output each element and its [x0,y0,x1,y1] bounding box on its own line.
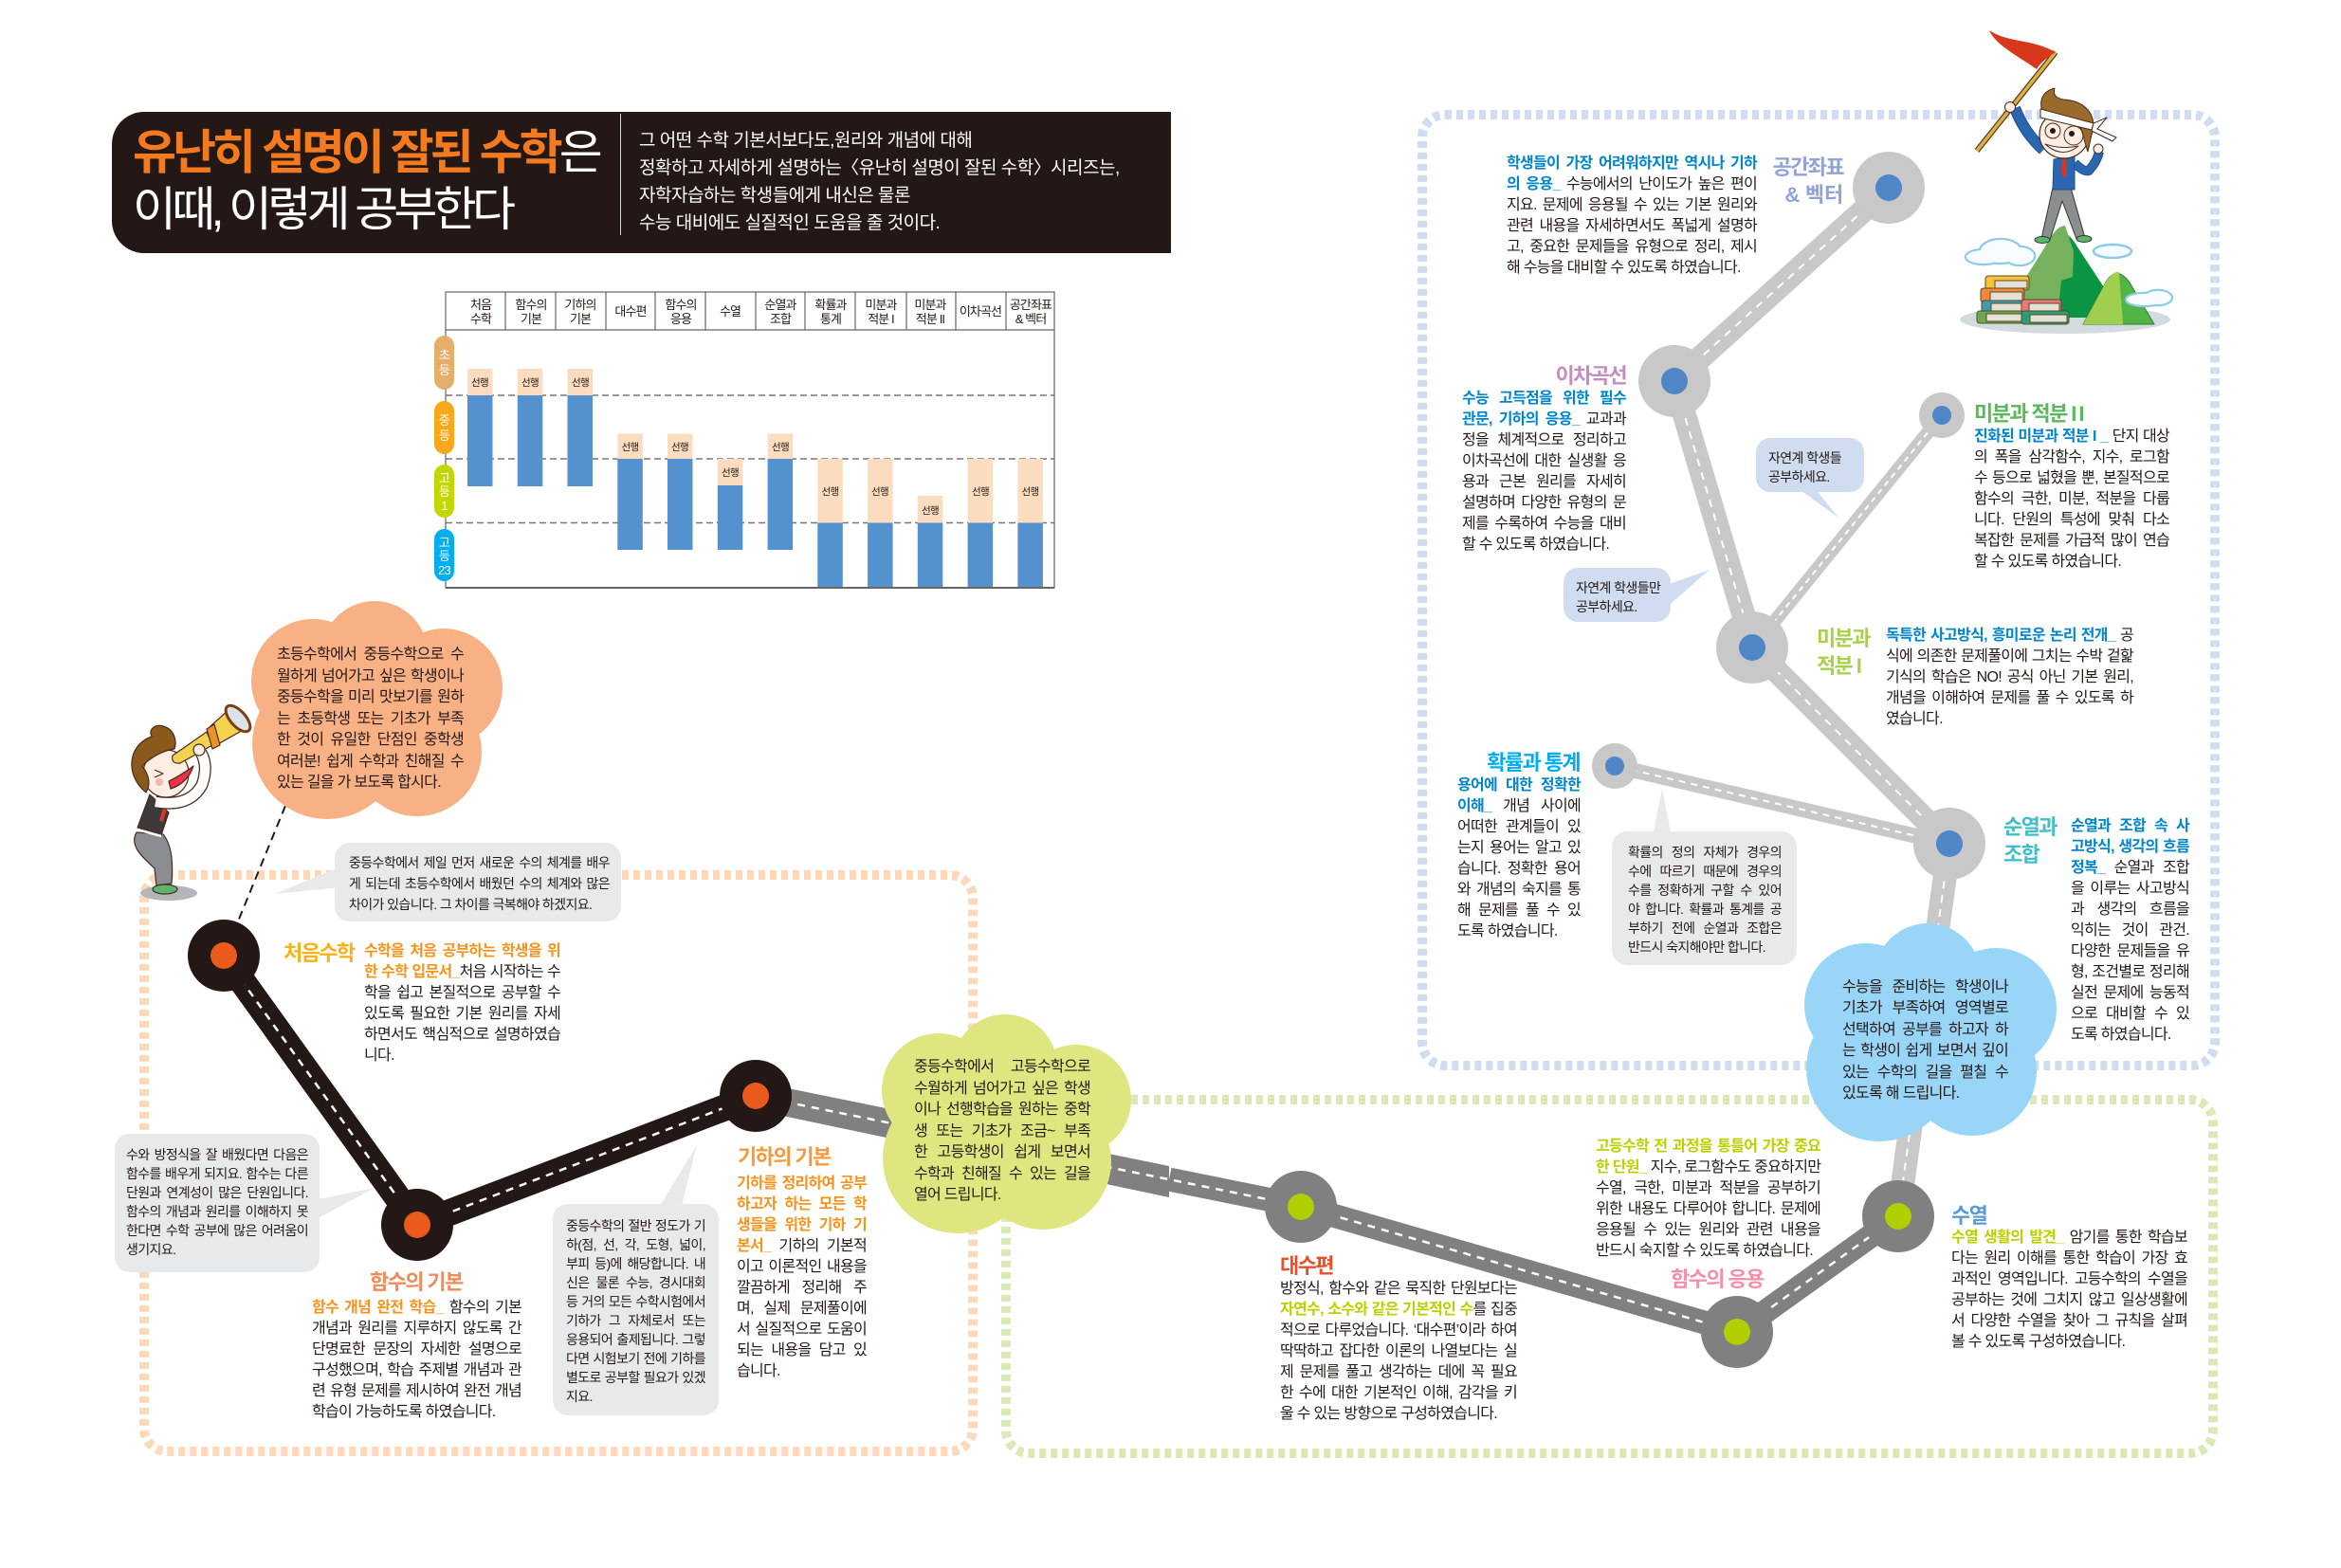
icon: student with telescope [132,702,254,901]
text: probability callout: 수를 정확하게 구할 수 있어 [1628,883,1782,898]
heading: 함수의 응용: 함수의 응용 [1671,1267,1764,1291]
text: top grey callout: 중등수학에서 제일 먼저 새로운 수의 체계를 배우 [349,855,610,870]
chart column headings: 처음 [470,298,492,312]
text: 대수편 [1280,1280,1517,1422]
text: 처음수학: 수학을 처음 공부하는 학생을 위 [364,943,560,959]
frame: green dotted section [1006,1100,2213,1453]
text: 함수의 기본: 구성했으며, 학습 주제별 개념과 관 [312,1362,521,1378]
text: 함수의 응용 [1596,1138,1820,1259]
chart column headings: 통계 [820,312,841,326]
heading: 기하의 기본: 기하의 기본 [738,1145,831,1168]
text: blue cloud [1842,978,2008,1102]
text: top grey callout: 게 되는데 초등수학에서 배웠던 수의 체계와 많은 [349,876,610,891]
text: orange cloud: 월하게 넘어가고 싶은 학생이나 [277,667,464,684]
text: 이차곡선: 이차곡선에 대한 실생활 응 [1462,453,1626,469]
text: 함수의 기본: 단명료한 문장의 자세한 설명으로 [312,1341,521,1358]
chart column headings: 수학 [470,312,492,326]
chart column headings [470,298,1052,326]
text: 순열과 조합: 고방식, 생각의 흐름 [2071,839,2189,855]
text: 공간좌표 & 벡터: 관련 내용을 자세하면서도 폭넓게 설명하 [1507,218,1757,234]
heading: 미분과 적분 I [1817,626,1871,677]
chart column headings: 기본 [570,312,592,326]
text: 미분과 적분 II [1974,428,2169,570]
text: 처음수학: 하면서도 핵심적으로 설명하였습 [364,1027,560,1043]
chart level pills: 23 [438,563,450,577]
text: 함수의 응용: 반드시 숙지할 수 있도록 하였습니다. [1596,1243,1813,1259]
text: 이차곡선: 제를 수록하여 수능을 대비 [1462,516,1626,532]
text: probability callout: 수에 따르기 때문에 경우의 [1628,864,1782,879]
heading: 확률과 통계: 확률과 통계 [1487,751,1580,774]
text: 공간좌표 & 벡터: 고, 중요한 문제들을 유형으로 정리, 제시 [1507,239,1757,255]
text: 수열: 다는 원리 이해를 통한 학습이 가장 효 [1951,1250,2187,1267]
chart column headings: 대수편 [614,304,647,319]
callout bubble: probability grey [1612,789,1797,965]
chart column headings: 기하의 [564,298,596,312]
text: 미분과 적분 I: 식에 의존한 문제풀이에 그치는 수박 겉핥 [1886,648,2133,665]
text: middle grey callout: 부피 등)에 해당합니다. 내 [566,1256,705,1271]
text: 순열과 조합: 형, 조건별로 정리해 [2071,964,2189,980]
chart lead-in labels: 선행 [572,377,589,389]
text: 함수의 기본: 련 유형 문제를 제시하여 완전 개념 [312,1383,521,1399]
text: middle grey callout: 하(점, 선, 각, 도형, 넓이, [566,1237,705,1252]
chart column headings: 수열 [720,304,741,319]
callout bubble: top grey [274,843,621,921]
chart level pills: 등 [439,484,450,499]
text: top grey callout [349,855,610,912]
chart column headings: 확률과 [814,298,848,312]
chart column headings: 함수의 [515,298,547,312]
text: 이차곡선: 설명하며 다양한 유형의 문 [1462,495,1626,511]
text: 수열: 볼 수 있도록 구성하였습니다. [1951,1334,2125,1350]
text: 확률과 통계: 는지 용어는 알고 있 [1457,840,1581,856]
text: 처음수학: 학을 쉽고 본질적으로 공부할 수 [364,985,560,1001]
text: 수열 [1951,1229,2187,1350]
text: probability callout: 확률의 정의 자체가 경우의 [1628,845,1782,860]
text: 함수의 기본 [312,1299,521,1420]
road network: light grey upper routes [1615,188,1949,1216]
text: 미분과 적분 II: 수 등으로 넓혔을 뿐, 본질적으로 [1974,470,2169,486]
text: top grey callout: 차이가 있습니다. 그 차이를 극복해야 하겠지요. [349,897,592,912]
text: green cloud: 생 또는 기초가 조금~ 부족 [914,1122,1090,1140]
chart level pills [434,336,454,581]
text: 순열과 조합: 도록 하였습니다. [2071,1027,2171,1043]
text: 미분과 적분 II: 진화된 미분과 적분 I _ 단지 대상 [1974,428,2169,445]
text: 대수편: 적으로 다루었습니다. ‘대수편’이라 하여 [1280,1322,1517,1339]
heading: 공간좌표 & 벡터: & 벡터 [1784,182,1843,207]
text: 순열과 조합: 으로 대비할 수 있 [2071,1006,2189,1022]
text: middle grey callout: 중등수학의 절반 정도가 기 [566,1218,705,1233]
text: 순열과 조합: 정복_ 순열과 조합 [2071,860,2189,876]
chart lead-in labels: 선행 [471,377,488,389]
chart column headings: 함수의 [665,298,697,312]
text: 기하의 기본: 습니다. [737,1363,780,1379]
text: 함수의 응용: 응용될 수 있는 원리와 관련 내용을 [1596,1222,1820,1238]
text: 미분과 적분 II: 복잡한 문제를 가급적 많이 연습 [1974,533,2169,549]
text: middle grey callout: 지요. [566,1389,593,1404]
text: 함수의 기본: 함수 개념 완전 학습_ 함수의 기본 [312,1300,521,1316]
banner intro text [639,131,1120,233]
heading: 순열과 조합 [2003,815,2058,866]
text: orange cloud: 는 초등학생 또는 기초가 부족 [277,711,464,726]
text: middle grey callout: 기하가 그 자체로서 또는 [566,1313,705,1328]
text: 함수의 응용: 수열, 극한, 미분과 적분을 공부하기 [1596,1180,1820,1196]
text: 기하의 기본: 되는 내용을 담고 있 [737,1342,867,1358]
heading: 순열과 조합: 조합 [2003,842,2039,866]
text: 이차곡선: 용과 근본 원리를 자세히 [1462,474,1626,490]
banner intro text: 정확하고 자세하게 설명하는 〈유난히 설명이 잘된 수학〉 시리즈는, [639,158,1120,178]
text: green cloud: 이나 선행학습을 원하는 중학 [914,1102,1090,1118]
text: blue bubble right: 공부하세요. [1768,469,1830,484]
text: 대수편: 방정식, 함수와 같은 묵직한 단원보다는 [1280,1281,1517,1297]
text: left grey callout: 함수를 배우게 되지요. 함수는 다른 [126,1166,308,1181]
text: 확률과 통계: 해 문제를 풀 수 있 [1457,903,1581,919]
frame: blue dotted section [1422,115,2215,1066]
text: 처음수학: 니다. [364,1048,394,1064]
text: green cloud [914,1058,1090,1203]
text: 대수편: 딱딱하고 잡다한 이론의 나열보다는 실 [1280,1343,1517,1359]
text: 이차곡선: 정을 체계적으로 정리하고 [1462,432,1626,448]
text: 미분과 적분 II: 의 폭을 삼각함수, 지수, 로그함 [1974,449,2169,465]
banner intro text: 그 어떤 수학 기본서보다도,원리와 개념에 대해 [639,131,972,151]
text: 확률과 통계: 도록 하였습니다. [1457,923,1558,939]
road network: dark grey lower routes [756,1082,1898,1332]
text: 이차곡선: 수능 고득점을 위한 필수 [1462,391,1626,407]
text: 대수편: 자연수, 소수와 같은 기본적인 수를 집중 [1280,1302,1517,1318]
text: left grey callout: 생기지요. [126,1242,175,1257]
text: orange cloud [277,647,465,791]
text: blue cloud: 수능을 준비하는 학생이나 [1842,979,2008,995]
callout bubble: left grey [115,1134,375,1272]
text: 미분과 적분 I: 독특한 사고방식, 흥미로운 논리 전개_ 공 [1886,628,2133,644]
cloud: blue [1804,923,2057,1141]
callout bubble: middle grey [553,1145,719,1415]
text: blue cloud: 있는 수학의 길을 펼칠 수 [1842,1065,2008,1081]
text: 확률과 통계: 어떠한 관계들이 있 [1457,819,1581,835]
text: blue cloud: 있도록 해 드립니다. [1842,1085,1959,1102]
text: 순열과 조합: 익히는 것이 관건. [2071,922,2189,939]
text: orange cloud: 여러분! 쉽게 수학과 친해질 수 [277,753,464,770]
chart lead-in labels: 선행 [671,442,688,453]
chart level pills: 1 [441,499,448,513]
text: 순열과 조합 [2071,817,2190,1043]
text: 이차곡선: 할 수 있도록 하였습니다. [1462,537,1609,553]
frame: orange dotted section [144,875,973,1451]
chart lead-in labels: 선행 [772,442,789,453]
heading line two: 이때, 이렇게 공부한다 [133,183,511,236]
text: blue cloud: 기초가 부족하여 영역별로 [1842,1000,2008,1016]
text: middle grey callout: 등 거의 모든 수학시험에서 [566,1294,705,1309]
text: 확률과 통계 [1457,776,1582,939]
chart column headings: 순열과 [764,298,797,312]
text: 순열과 조합: 을 이루는 사고방식 [2071,881,2189,897]
chart column headings: & 벡터 [1015,312,1046,326]
text: 미분과 적분 II: 함수의 극한, 미분, 적분을 다룹 [1974,491,2169,507]
chart column headings: 공간좌표 [1010,298,1052,312]
text: green cloud: 수월하게 넘어가고 싶은 학생 [914,1081,1090,1096]
text: blue cloud: 선택하여 공부를 하고자 하 [1842,1022,2008,1038]
heading: 공간좌표 & 벡터 [1772,155,1844,207]
text: middle grey callout: 응용되어 출제됩니다. 그렇 [566,1332,705,1347]
text: left grey callout: 함수의 개념과 원리를 이해하지 못 [126,1204,308,1219]
banner intro text: 수능 대비에도 실질적인 도움을 줄 것이다. [639,213,940,233]
text: 대수편: 울 수 있는 방향으로 구성하였습니다. [1280,1406,1497,1422]
text: 기하의 기본 [737,1175,867,1379]
text: 기하의 기본: 서 실질적으로 도움이 [737,1322,867,1338]
chart lead-in labels: 선행 [922,505,939,517]
text: blue bubble left: 자연계 학생들만 [1576,580,1660,595]
heading: 대수편: 대수편 [1280,1253,1333,1278]
text: 수열: 과적인 영역입니다. 고등수학의 수열을 [1951,1271,2187,1287]
text: 순열과 조합: 실전 문제에 능동적 [2071,985,2189,1001]
chart peach lead-in bars [467,369,1043,523]
text: left grey callout [126,1147,308,1257]
road network: black beginner route [224,956,756,1225]
cloud: orange [251,601,503,819]
chart level pills: 고 [439,536,450,550]
text: 공간좌표 & 벡터: 해 수능을 대비할 수 있도록 하였습니다. [1507,260,1741,276]
text: probability callout [1628,845,1782,955]
callout bubble: blue right [1756,438,1864,518]
chart column headings: 미분과 [865,298,898,312]
text: 대수편: 한 수에 대한 기본적인 이해, 감각을 키 [1280,1385,1517,1401]
heading: 미분과 적분 I: 미분과 [1817,626,1870,650]
text: 확률과 통계: 용어에 대한 정확한 [1457,777,1581,793]
text: 수열: 서 다양한 수열을 찾아 그 규칙을 살펴 [1951,1313,2187,1329]
text: green cloud: 중등수학에서 고등수학으로 [914,1059,1090,1075]
text: blue cloud: 는 학생이 쉽게 보면서 깊이 [1842,1043,2008,1059]
chart column headings: 응용 [670,312,692,326]
chart level pills: 등 [439,549,450,563]
chart level pills: 고 [439,471,450,485]
text: 공간좌표 & 벡터: 지요. 문제에 응용될 수 있는 기본 원리와 [1507,197,1757,213]
text: 순열과 조합: 다양한 문제들을 유 [2071,943,2189,959]
chart level pills: 중 [439,413,450,428]
text: 미분과 적분 II: 할 수 있도록 하였습니다. [1974,554,2121,570]
icon: student with flag on mountain [1960,30,2172,334]
text: 수열: 공부하는 것에 그치지 않고 일상생활에 [1951,1292,2187,1308]
chart column headings: 미분과 [914,298,947,312]
text: 확률과 통계: 와 개념의 숙지를 통 [1457,882,1581,898]
text: 미분과 적분 I: 였습니다. [1886,711,1943,727]
text: blue bubble left [1576,580,1661,614]
text: blue bubble left: 공부하세요. [1576,599,1637,614]
text: orange cloud: 중등수학을 미리 맛보기를 원하 [277,689,464,705]
text: orange cloud: 초등수학에서 중등수학으로 수 [277,647,464,663]
heading: 공간좌표 & 벡터: 공간좌표 [1772,155,1843,178]
chart lead-in labels: 선행 [521,377,539,389]
text: 함수의 응용: 고등수학 전 과정을 통틀어 가장 중요 [1596,1139,1820,1155]
text: 미분과 적분 II: 니다. 단원의 특성에 맞춰 다소 [1974,512,2169,528]
text: probability callout: 부하기 전에 순열과 조합은 [1628,921,1782,936]
text: 함수의 기본: 학습이 가능하도록 하였습니다. [312,1404,495,1420]
heading line one: 유난히 설명이 잘된 수학은 [133,126,599,179]
text: 처음수학 [364,942,560,1064]
text: probability callout: 반드시 숙지해야만 합니다. [1628,939,1765,955]
text: 처음수학: 있도록 필요한 기본 원리를 자세 [364,1006,560,1022]
text: left grey callout: 한다면 수학 공부에 많은 어려움이 [126,1223,308,1238]
heading: 이차곡선: 이차곡선 [1555,364,1626,387]
text: left grey callout: 단원과 연계성이 많은 단원입니다. [126,1185,308,1200]
chart column headings: 조합 [770,312,792,326]
text: 기하의 기본: 깔끔하게 정리해 주 [737,1280,867,1296]
heading: 미분과 적분 II: 미분과 적분 II [1974,402,2086,425]
text: blue bubble right: 자연계 학생들 [1768,450,1841,465]
road nodes [188,152,1985,1368]
text: 기하의 기본: 며, 실제 문제풀이에 [737,1301,867,1317]
text: 공간좌표 & 벡터: 학생들이 가장 어려워하지만 역시나 기하 [1507,155,1757,172]
chart lead-in labels: 선행 [822,486,838,498]
dashed link from orange cloud to first node [238,806,285,921]
banner divider [620,114,621,235]
text: orange cloud: 있는 길을 가 보도록 합시다. [277,775,441,791]
text: 기하의 기본: 하고자 하는 모든 학 [737,1196,867,1212]
chart column headings: 적분 II [916,312,944,326]
chart column headings: 적분 I [868,312,894,326]
text: 미분과 적분 I: 개념을 이해하여 문제를 풀 수 있도록 하 [1886,690,2133,706]
chart lead-in labels: 선행 [722,467,739,479]
text: 순열과 조합: 과 생각의 흐름을 [2071,902,2189,918]
chart lead-in labels: 선행 [972,486,989,498]
text: 이차곡선: 관문, 기하의 응용_ 교과과 [1462,411,1626,428]
text: 이차곡선 [1462,390,1627,553]
text: middle grey callout: 신은 물론 수능, 경시대회 [566,1275,705,1290]
text: 함수의 응용: 위한 내용도 다루어야 합니다. 문제에 [1596,1201,1820,1217]
text: 기하의 기본: 본서_ 기하의 기본적 [737,1238,867,1254]
heading: 미분과 적분 I: 적분 I [1817,654,1860,677]
text: green cloud: 열어 드립니다. [914,1187,1001,1203]
chart dashed level lines [446,395,1054,523]
text: 공간좌표 & 벡터: 의 응용_ 수능에서의 난이도가 높은 편이 [1507,176,1757,192]
heading: 수열: 수열 [1951,1204,1986,1227]
text: middle grey callout: 다면 시험보기 전에 기하를 [566,1351,705,1366]
title banner [112,112,1171,253]
text: 공간좌표 & 벡터 [1507,155,1758,276]
chart lead-in labels [471,377,1038,517]
text: middle grey callout: 별도로 공부할 필요가 있겠 [566,1370,705,1385]
text: green cloud: 한 고등학생이 쉽게 보면서 [914,1144,1090,1160]
text: blue bubble right [1768,450,1841,484]
banner intro text: 자학자습하는 학생들에게 내신은 물론 [639,186,910,206]
text: 기하의 기본: 이고 이론적인 내용을 [737,1259,867,1275]
text: 처음수학: 한 수학 입문서_처음 시작하는 수 [364,964,560,980]
text: 확률과 통계: 습니다. 정확한 용어 [1457,861,1581,877]
text: 미분과 적분 I: 기식의 학습은 NO! 공식 아닌 기본 원리, [1886,669,2133,685]
chart table grid [446,292,1054,588]
text: probability callout: 야 합니다. 확률과 통계를 공 [1628,902,1782,917]
chart column headings: 기본 [521,312,542,326]
text: 대수편: 제 문제를 풀고 생각하는 데에 꼭 필요 [1280,1364,1517,1380]
chart lead-in labels: 선행 [622,442,638,453]
text: 기하의 기본: 생들을 위한 기하 기 [737,1217,867,1233]
heading: 함수의 기본: 함수의 기본 [370,1270,463,1293]
text: 수열: 수열 생활의 발견_ 암기를 통한 학습보 [1951,1230,2187,1246]
chart level pills: 등 [439,363,450,377]
heading: 처음수학: 처음수학 [283,940,355,965]
text: green cloud: 수학과 친해질 수 있는 길을 [914,1166,1090,1181]
text: left grey callout: 수와 방정식을 잘 배웠다면 다음은 [126,1147,308,1162]
text: 함수의 기본: 개념과 원리를 지루하지 않도록 간 [312,1321,521,1337]
text: 순열과 조합: 순열과 조합 속 사 [2071,818,2189,834]
heading: 순열과 조합: 순열과 [2003,815,2057,838]
chart column headings: 이차곡선 [960,304,1001,319]
chart level pills: 초 [439,348,450,362]
text: 기하의 기본: 기하를 정리하여 공부 [737,1176,867,1192]
chart blue study bars [467,395,1043,588]
cloud: green [882,1014,1131,1233]
chart: study timing table [434,292,1054,588]
text: 함수의 응용: 한 단원_ 지수, 로그함수도 중요하지만 [1596,1159,1820,1176]
chart lead-in labels: 선행 [1022,486,1038,498]
text: 확률과 통계: 이해_ 개념 사이에 [1457,798,1581,814]
chart level pills: 등 [439,428,450,443]
callout bubble: blue left [1564,568,1710,622]
text: middle grey callout [566,1218,705,1404]
text: 미분과 적분 I [1886,627,2133,727]
chart lead-in labels: 선행 [871,486,888,498]
text: orange cloud: 한 것이 유일한 단점인 중학생 [277,732,464,748]
